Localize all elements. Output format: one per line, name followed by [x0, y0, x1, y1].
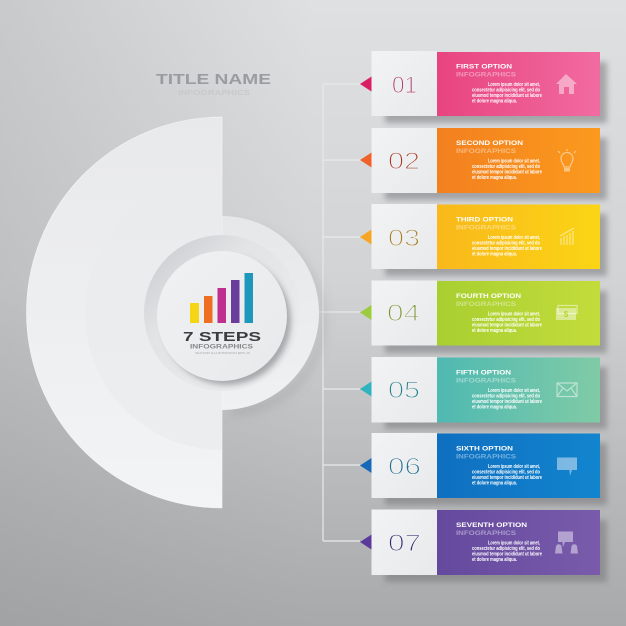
step 2: INFOGRAPHICS [456, 148, 517, 155]
step 6: eiusmod tempor incididunt ut labore [472, 475, 542, 481]
step 2: consectetur adipisicing elit, sed do [472, 164, 540, 170]
step 2 [360, 128, 607, 200]
step 1: 01 [392, 72, 417, 99]
step 3: eiusmod tempor incididunt ut labore [472, 246, 542, 252]
center label: VECTOR ILLUSTRATION EPS 10 [195, 351, 250, 355]
step 4: 04 [387, 300, 420, 327]
center disc shadow [163, 257, 291, 385]
step 1: FIRST OPTION [456, 64, 512, 70]
step 3: et dolore magna aliqua. [472, 252, 517, 258]
step 7: et dolore magna aliqua. [472, 557, 517, 563]
icon: banknote [556, 306, 577, 320]
step 4 [360, 280, 607, 353]
bar chart icon [190, 273, 253, 323]
step 7: 07 [388, 530, 421, 557]
step 7: eiusmod tempor incididunt ut labore [472, 552, 542, 558]
step 4: et dolore magna aliqua. [472, 328, 517, 334]
step 1 [360, 51, 607, 123]
step 5: et dolore magna aliqua. [472, 404, 517, 410]
large half circle [27, 117, 222, 508]
icon: banknote: $ [564, 310, 569, 319]
icon: rising chart [560, 228, 574, 245]
step 5: consectetur adipisicing elit, sed do [472, 394, 540, 400]
center label [183, 330, 261, 355]
step 7 [360, 510, 607, 582]
middle ring [125, 216, 319, 410]
center disc [157, 251, 287, 381]
icon: house [556, 74, 577, 94]
step 2: Lorem ipsum dolor sit amet, [488, 158, 540, 164]
step 7: Lorem ipsum dolor sit amet, [488, 540, 540, 546]
title [156, 71, 271, 97]
icon: light bulb [558, 149, 576, 172]
step 3: 03 [388, 225, 420, 252]
center label: 7 STEPS [183, 330, 261, 344]
icon: two people talking [555, 532, 578, 554]
step 3: THIRD OPTION [456, 216, 513, 224]
step 1: eiusmod tempor incididunt ut labore [472, 93, 542, 99]
step 2: et dolore magna aliqua. [472, 175, 517, 181]
title: TITLE NAME [156, 71, 271, 88]
step 1: INFOGRAPHICS [456, 72, 517, 78]
step 6: consectetur adipisicing elit, sed do [472, 470, 540, 476]
step 7: INFOGRAPHICS [456, 530, 517, 537]
step 6 [360, 433, 607, 505]
step 5: FIFTH OPTION [456, 370, 511, 376]
step 2: 02 [388, 148, 420, 175]
icon: speech bubble [557, 458, 577, 476]
step 4: consectetur adipisicing elit, sed do [472, 317, 540, 323]
step 2: eiusmod tempor incididunt ut labore [472, 170, 542, 176]
inner arc of half circle [85, 176, 222, 450]
step 1: consectetur adipisicing elit, sed do [472, 88, 540, 94]
step 4: INFOGRAPHICS [456, 301, 517, 308]
step 6: 06 [388, 454, 421, 480]
step 3 [360, 204, 607, 276]
step 7: SEVENTH OPTION [456, 522, 527, 529]
connector lines [290, 84, 360, 541]
center label: INFOGRAPHICS [190, 344, 254, 350]
step 7: consectetur adipisicing elit, sed do [472, 546, 540, 552]
title: INFOGRAPHICS [178, 90, 250, 97]
step 5: 05 [388, 377, 420, 404]
step 1: et dolore magna aliqua. [472, 98, 517, 104]
step 3: INFOGRAPHICS [456, 224, 517, 232]
step 3: consectetur adipisicing elit, sed do [472, 240, 540, 246]
step 6: INFOGRAPHICS [456, 454, 517, 460]
step 4: FOURTH OPTION [456, 293, 521, 300]
step 4: Lorem ipsum dolor sit amet, [488, 312, 540, 318]
step 5: Lorem ipsum dolor sit amet, [488, 388, 540, 394]
step 1: Lorem ipsum dolor sit amet, [488, 82, 540, 88]
step 2: SECOND OPTION [456, 140, 523, 147]
step 3: Lorem ipsum dolor sit amet, [488, 235, 540, 241]
step 5 [360, 357, 607, 429]
step 5: eiusmod tempor incididunt ut labore [472, 399, 542, 405]
step 5: INFOGRAPHICS [456, 378, 517, 384]
step 6: SIXTH OPTION [456, 446, 513, 452]
step 4: eiusmod tempor incididunt ut labore [472, 322, 542, 328]
half circle shadow [220, 122, 228, 512]
hole [144, 235, 300, 391]
icon: envelope [557, 383, 577, 396]
outer ring shadow [230, 225, 325, 415]
step 6: et dolore magna aliqua. [472, 480, 517, 486]
concentric diagram [27, 117, 325, 512]
step 6: Lorem ipsum dolor sit amet, [488, 464, 540, 470]
